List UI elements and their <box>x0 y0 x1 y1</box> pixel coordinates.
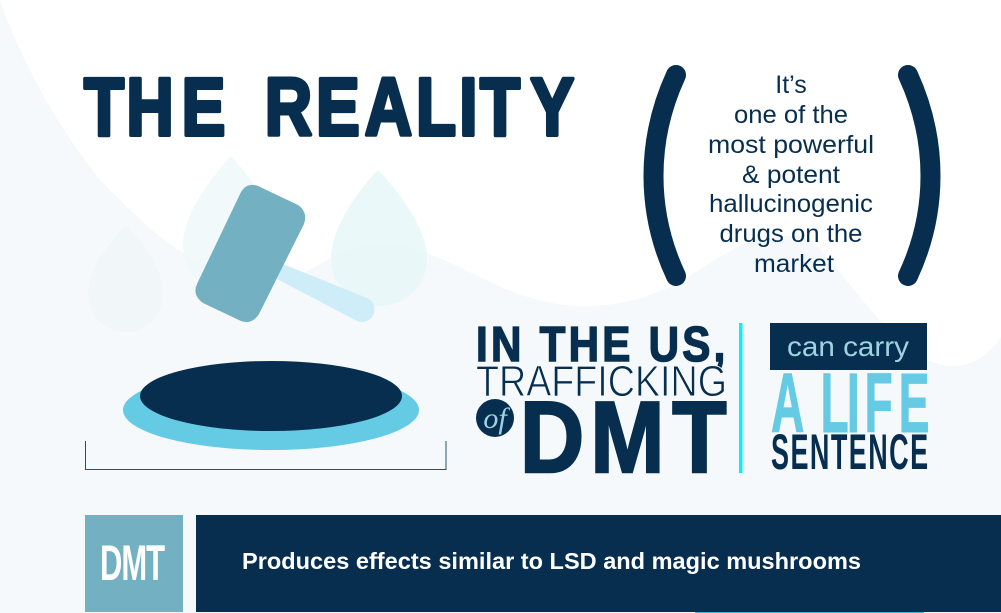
text block: powerful drug statement: It’s <box>775 71 807 99</box>
gavel base <box>123 361 419 450</box>
left parenthesis <box>654 75 676 276</box>
DMT tag <box>85 515 183 612</box>
heading: in the us, trafficking of DMT: DMT <box>520 382 727 494</box>
text block: powerful drug statement: most powerful <box>708 131 874 159</box>
text block: powerful drug statement: drugs on the <box>720 220 862 248</box>
can carry label: can carry <box>787 331 909 362</box>
title: THE REALITY <box>84 61 574 153</box>
effects banner <box>196 515 1001 613</box>
text block: powerful drug statement: & potent <box>742 161 840 189</box>
right parenthesis <box>908 75 930 276</box>
text block: powerful drug statement: hallucinogenic <box>709 190 873 218</box>
heading: in the us, trafficking of DMT <box>476 317 727 494</box>
heading: in the us, trafficking of DMT: IN THE US, <box>476 317 725 372</box>
DMT tag: DMT <box>100 534 165 591</box>
icon: water drop centre <box>183 156 279 292</box>
text block: powerful drug statement: one of the <box>734 101 848 129</box>
icon: gavel <box>195 185 375 322</box>
icon: water drop right <box>331 170 427 306</box>
text block: powerful drug statement: market <box>754 250 834 278</box>
a life: A LIFE <box>771 358 929 451</box>
bracket under gavel <box>86 441 446 470</box>
sentence: SENTENCE <box>771 424 928 480</box>
effects banner: Produces effects similar to LSD and magic mushrooms <box>242 548 861 574</box>
icon: water drop left <box>88 225 163 332</box>
text block: powerful drug statement <box>708 71 874 278</box>
icon: of badge <box>476 399 514 437</box>
heading: in the us, trafficking of DMT: TRAFFICKING <box>476 357 727 406</box>
can carry label <box>770 323 927 370</box>
icon: of badge: of <box>483 402 510 435</box>
divider <box>739 323 742 473</box>
